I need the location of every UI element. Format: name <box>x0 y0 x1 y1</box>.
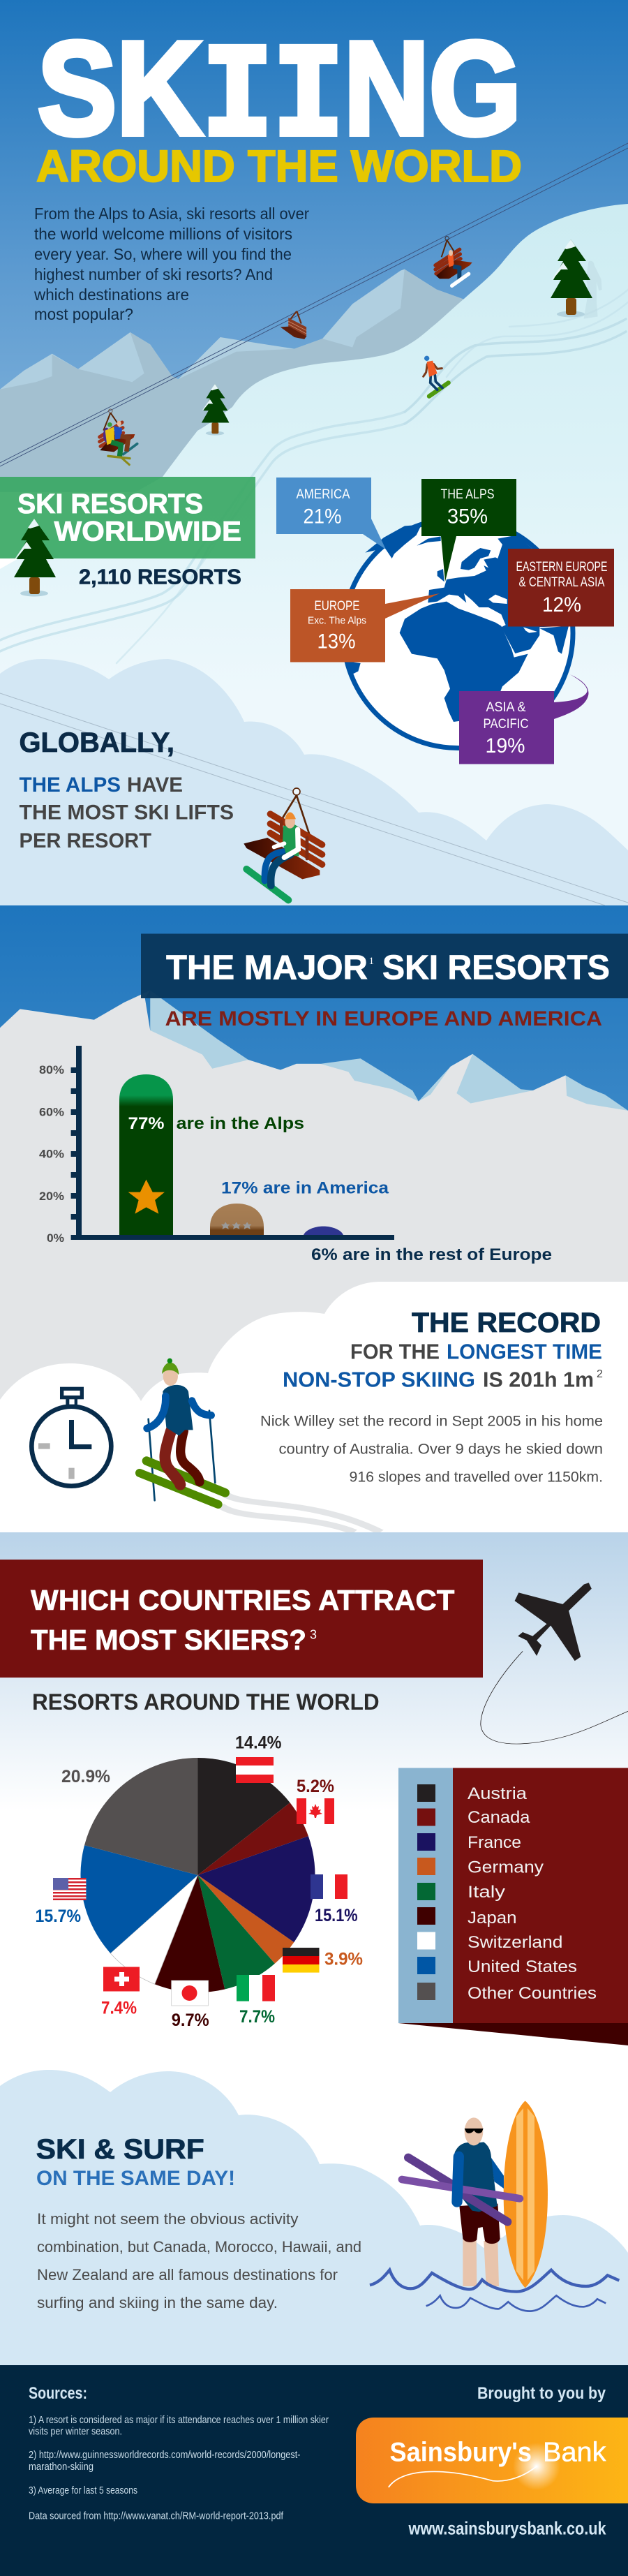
pie labels: 7.4% <box>101 1999 137 2018</box>
illustration: chairlift cables <box>0 143 628 466</box>
icon: flag of Italy <box>237 1975 275 2001</box>
bar: America 17% <box>210 1204 264 1235</box>
callout: Europe excluding the Alps 13% <box>290 589 440 662</box>
illustration: snow slope <box>0 204 628 908</box>
callout: America 21%: 21% <box>303 505 342 528</box>
pie labels: 3.9% <box>324 1950 363 1969</box>
heading: the major ski resorts: THE MAJOR <box>166 949 368 987</box>
slice: Italy 7.7% <box>198 1875 275 1990</box>
heading: which countries attract the most skiers <box>31 1584 455 1656</box>
axis labels: 0% <box>47 1232 64 1245</box>
text block: for the longest time non-stop skiing: LONGEST TIME <box>447 1340 602 1364</box>
legend labels: Canada <box>468 1808 530 1827</box>
panel: white cloud for record section <box>0 1282 628 1532</box>
text block: source notes: marathon-skiing <box>29 2461 94 2473</box>
slice: other countries 20.9% <box>84 1758 198 1875</box>
illustration: lift cables across cloud <box>0 693 628 905</box>
text block: introduction: which destinations are <box>33 286 189 304</box>
text block: introduction: every year. So, where will you find the <box>34 245 292 263</box>
axis labels <box>39 1064 64 1245</box>
icon: star on Alps bar <box>128 1180 165 1214</box>
slice: Switzerland 7.4% <box>110 1875 198 1984</box>
heading: the major ski resorts <box>166 949 610 987</box>
pie chart: resorts by country <box>80 1758 315 1992</box>
icon: snowboarder <box>424 356 449 397</box>
illustration: ski tracks behind skier <box>220 1495 380 1532</box>
illustration: globe <box>343 518 573 748</box>
pie labels: 7.7% <box>239 2007 275 2027</box>
slice: France 15.1% <box>198 1836 315 1942</box>
slice: Germany 3.9% <box>198 1875 294 1964</box>
text block: introduction: From the Alps to Asia, ski resorts all over <box>34 205 309 223</box>
callout: Eastern Europe and Central Asia 12%: 12% <box>542 593 581 616</box>
legend labels: France <box>468 1833 521 1852</box>
icon: flag of Switzerland <box>103 1967 140 1991</box>
bar: Alps 77% <box>119 1074 173 1235</box>
label: 77%: 77% <box>128 1114 165 1133</box>
icon: stars on America bar <box>221 1222 251 1229</box>
icon: tree by banner <box>14 519 56 596</box>
panel: major ski resorts background <box>0 905 628 1296</box>
icon: surfer with skis and board <box>402 2101 548 2288</box>
heading: ski resorts worldwide: SKI RESORTS <box>17 489 203 519</box>
callout: Eastern Europe and Central Asia 12% <box>508 549 614 627</box>
axis labels: 40% <box>39 1148 64 1161</box>
text block: ski and surf description: combination, but Canada, Morocco, Hawaii, and <box>37 2238 361 2256</box>
axis labels: 60% <box>39 1106 64 1118</box>
legend labels: Italy <box>468 1883 505 1902</box>
legend labels: Japan <box>468 1909 516 1927</box>
text block: source notes <box>29 2414 329 2522</box>
illustration: faint skier shadow <box>584 261 602 319</box>
callout: The Alps 35% <box>421 479 516 582</box>
pie labels: 9.7% <box>172 2011 209 2030</box>
stat: 2,110 resorts: 2,110 RESORTS <box>79 565 241 589</box>
text block: introduction: most popular? <box>34 305 133 323</box>
callout: The Alps 35%: THE ALPS <box>441 487 494 502</box>
icon: chair with two riders <box>100 409 137 465</box>
icon: chair with rider, top <box>435 237 472 286</box>
logo: Sainsbury's Bank <box>356 2418 628 2503</box>
text block: Nick Willey record <box>260 1413 603 1485</box>
text block: ski and surf description <box>37 2210 361 2311</box>
icon: snowboarder on chairlift <box>244 788 322 900</box>
panel: countries section background <box>0 1532 628 1812</box>
text block: for the longest time non-stop skiing: 2 <box>597 1368 603 1380</box>
text block: ski and surf description: surfing and skiing in the same day. <box>37 2294 278 2311</box>
callout: Europe excluding the Alps 13%: 13% <box>317 630 356 653</box>
legend labels: United States <box>468 1957 577 1976</box>
illustration: mountain range <box>0 269 465 492</box>
subtitle: around the world: AROUND THE WORLD <box>36 141 522 191</box>
logo: Sainsbury's Bank: Sainsbury's <box>389 2438 532 2468</box>
pie labels: 15.1% <box>315 1906 358 1925</box>
text block: for the longest time non-stop skiing: IS 201h 1m <box>483 1367 594 1392</box>
text block: Nick Willey record: 916 slopes and travelled over 1150km. <box>349 1469 603 1485</box>
text block: source notes: visits per winter season. <box>29 2425 122 2438</box>
heading: the record: THE RECORD <box>412 1308 601 1338</box>
label: 6% are in the rest of Europe: 6% are in the rest of Europe <box>311 1245 552 1264</box>
icon: flag of France <box>311 1874 347 1899</box>
callout: Asia and Pacific 19% <box>459 674 588 764</box>
text block: source notes: 2) http://www.guinnessworldrecords.com/world-records/2000/longest- <box>29 2449 300 2461</box>
legend labels: Austria <box>468 1784 528 1803</box>
text block: the alps have the most ski lifts per resort: THE MOST SKI LIFTS <box>20 801 234 824</box>
heading: the major ski resorts: SKI RESORTS <box>382 949 610 987</box>
callout: America 21%: AMERICA <box>296 487 350 502</box>
heading: sources: Sources: <box>29 2384 87 2403</box>
text block: ski and surf description: It might not seem the obvious activity <box>37 2210 299 2228</box>
axis labels: 80% <box>39 1064 64 1076</box>
pie labels: 14.4% <box>235 1733 282 1753</box>
panel: footer <box>0 2365 628 2576</box>
legend labels <box>468 1784 597 2003</box>
text block: for the longest time non-stop skiing <box>283 1340 603 1392</box>
text block: source notes: 3) Average for last 5 seasons <box>29 2485 137 2496</box>
icon: tree on right of slope <box>551 239 592 317</box>
text block: the alps have the most ski lifts per resort: THE ALPS <box>20 773 121 797</box>
icon: flag of Austria <box>236 1757 274 1783</box>
legend labels: Germany <box>468 1858 544 1877</box>
illustration: waves <box>370 2270 619 2311</box>
chart axes <box>71 1046 394 1240</box>
icon: small tree on slope <box>202 384 229 436</box>
text block: the alps have the most ski lifts per resort <box>20 773 234 852</box>
label: 17% are in America: 17% are in America <box>221 1178 389 1198</box>
slice: Canada 5.2% <box>198 1803 308 1875</box>
text block: ski and surf description: New Zealand are all famous destinations for <box>37 2266 338 2283</box>
text block: Nick Willey record: country of Australia. Over 9 days he skied down <box>279 1441 603 1457</box>
text block: source notes: Data sourced from http://www.vanat.ch/RM-world-report-2013.pdf <box>29 2510 284 2522</box>
panel: major ski resorts title band <box>141 934 628 998</box>
panel: ski resorts worldwide banner <box>0 477 255 558</box>
subheading: mostly in Europe and America: ARE MOSTLY IN EUROPE AND AMERICA <box>165 1007 602 1030</box>
icon: flag of Japan <box>172 1981 208 2006</box>
icon: flag of Germany <box>283 1948 320 1973</box>
title: SKIING: SKIING <box>38 15 521 175</box>
heading: ski resorts worldwide: WORLDWIDE <box>54 516 241 547</box>
subheading: on the same day: ON THE SAME DAY! <box>36 2167 235 2190</box>
legend labels: Other Countries <box>468 1984 597 2003</box>
heading: which countries attract the most skiers: THE MOST SKIERS? <box>31 1624 306 1656</box>
icon: stopwatch <box>31 1389 111 1486</box>
icon: empty chair <box>281 311 306 339</box>
illustration: flight path <box>481 1651 628 1744</box>
text: brought to you by: Brought to you by <box>477 2384 606 2403</box>
text block: the alps have the most ski lifts per resort: PER RESORT <box>20 829 151 852</box>
panel: hero sky background <box>0 0 628 489</box>
illustration: ski tracks <box>0 290 628 663</box>
pie labels: 15.7% <box>35 1907 81 1926</box>
text block: introduction <box>33 205 309 323</box>
icon: airplane <box>515 1583 592 1661</box>
callout: Eastern Europe and Central Asia 12%: & CENTRAL ASIA <box>519 575 605 590</box>
text block: source notes: 1) A resort is considered as major if its attendance reaches over 1 million skier <box>29 2414 329 2426</box>
icon: flag of Canada <box>297 1798 334 1824</box>
text block: for the longest time non-stop skiing: FOR THE <box>350 1340 440 1364</box>
legend swatches <box>417 1784 435 2000</box>
callout: Asia and Pacific 19%: ASIA & <box>486 700 526 715</box>
axis labels: 20% <box>39 1190 64 1203</box>
pie labels: 20.9% <box>61 1767 110 1786</box>
text block: for the longest time non-stop skiing: NON-STOP SKIING <box>283 1367 475 1392</box>
slice: Japan 9.7% <box>155 1875 225 1992</box>
legend labels: Switzerland <box>468 1933 562 1952</box>
icon: skier <box>140 1359 225 1504</box>
heading: ski and surf: SKI & SURF <box>36 2134 204 2165</box>
callout: Europe excluding the Alps 13%: EUROPE <box>314 599 360 614</box>
heading: which countries attract the most skiers: 3 <box>310 1628 317 1642</box>
callout: Europe excluding the Alps 13%: Exc. The Alps <box>308 614 366 626</box>
heading: the major ski resorts: 1 <box>368 956 374 967</box>
text block: the alps have the most ski lifts per resort: HAVE <box>127 773 183 797</box>
bar: rest of Europe 6% <box>304 1227 343 1235</box>
panel: which countries title band <box>0 1560 483 1678</box>
logo: Sainsbury's Bank: Bank <box>543 2438 606 2468</box>
bar chart: major resorts by region <box>39 1046 552 1264</box>
heading: ski resorts worldwide <box>17 489 241 547</box>
callout: America 21% <box>276 478 386 549</box>
text block: introduction: highest number of ski resorts? And <box>34 265 273 283</box>
callout: Asia and Pacific 19%: 19% <box>486 734 525 757</box>
callout: The Alps 35%: 35% <box>447 505 488 528</box>
heading: which countries attract the most skiers: WHICH COUNTRIES ATTRACT <box>31 1584 455 1616</box>
heading: globally: GLOBALLY, <box>20 727 174 758</box>
text block: introduction: the world welcome millions of visitors <box>34 225 292 243</box>
label: are in the Alps: are in the Alps <box>177 1114 304 1133</box>
panel: legend <box>398 1768 628 2045</box>
slice: United States 15.7% <box>80 1845 198 1953</box>
heading: resorts around the world: RESORTS AROUND THE WORLD <box>32 1689 380 1715</box>
illustration: mountains behind bar chart <box>0 991 628 1535</box>
text block: Nick Willey record: Nick Willey set the record in Sept 2005 in his home <box>260 1413 603 1430</box>
pie labels <box>35 1733 363 2030</box>
slice: Austria 14.4% <box>198 1758 290 1875</box>
pie labels: 5.2% <box>297 1777 334 1796</box>
callout: Asia and Pacific 19%: PACIFIC <box>483 717 529 732</box>
illustration: cloud behind globally text <box>0 659 628 905</box>
panel: ski and surf cloud <box>0 2070 628 2365</box>
icon: flag of United States <box>53 1878 86 1900</box>
